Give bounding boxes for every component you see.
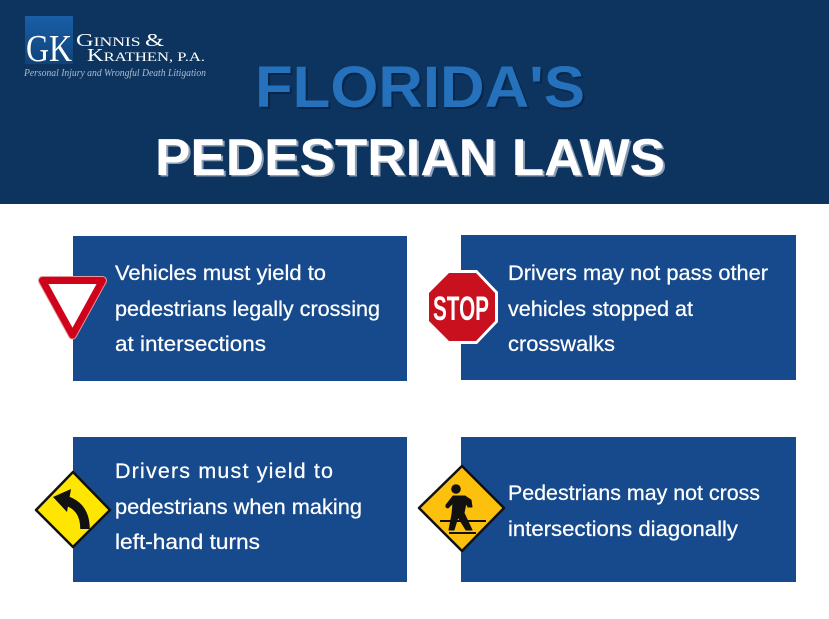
panel: drivers may not pass xyxy=(461,235,796,380)
panel: vehicles must yield: Vehicles must yield to xyxy=(115,261,326,285)
icon: left curve sign xyxy=(36,472,110,547)
panel: left-hand turns xyxy=(73,437,407,582)
icon: stop sign: STOP xyxy=(433,290,489,328)
icon: stop sign xyxy=(426,270,498,344)
panel: drivers may not pass: Drivers may not pass other xyxy=(508,261,768,285)
panel: no diagonal crossing xyxy=(461,437,796,582)
icon: pedestrian crossing sign xyxy=(419,466,504,551)
panel: left-hand turns: Drivers must yield to xyxy=(115,459,333,483)
icon: yield sign xyxy=(42,280,102,335)
logo xyxy=(23,16,206,79)
panel: no diagonal crossing: intersections diagonally xyxy=(508,517,738,541)
logo: GK xyxy=(26,28,72,70)
title: Florida's: FLORIDA'S xyxy=(257,57,587,122)
panel: left-hand turns: pedestrians when making xyxy=(115,495,362,519)
logo: Personal Injury and Wrongful Death Litigation xyxy=(23,68,206,79)
title: Pedestrian Laws: PEDESTRIAN LAWS xyxy=(157,130,667,188)
panel: vehicles must yield: at intersections xyxy=(115,332,266,356)
panel: vehicles must yield xyxy=(73,236,407,381)
panel: drivers may not pass: crosswalks xyxy=(508,332,615,356)
title: Florida's: FLORIDA'S xyxy=(255,55,585,120)
header banner xyxy=(0,0,829,204)
logo: G INNIS & xyxy=(76,30,164,50)
panel: vehicles must yield: pedestrians legally crossing xyxy=(115,297,380,321)
logo: K RATHEN, P.A. xyxy=(87,45,205,65)
title: Pedestrian Laws: PEDESTRIAN LAWS xyxy=(155,129,665,187)
panel: drivers may not pass: vehicles stopped at xyxy=(508,297,693,321)
panel: left-hand turns: left-hand turns xyxy=(115,530,260,554)
panel: no diagonal crossing: Pedestrians may not cross xyxy=(508,481,760,505)
